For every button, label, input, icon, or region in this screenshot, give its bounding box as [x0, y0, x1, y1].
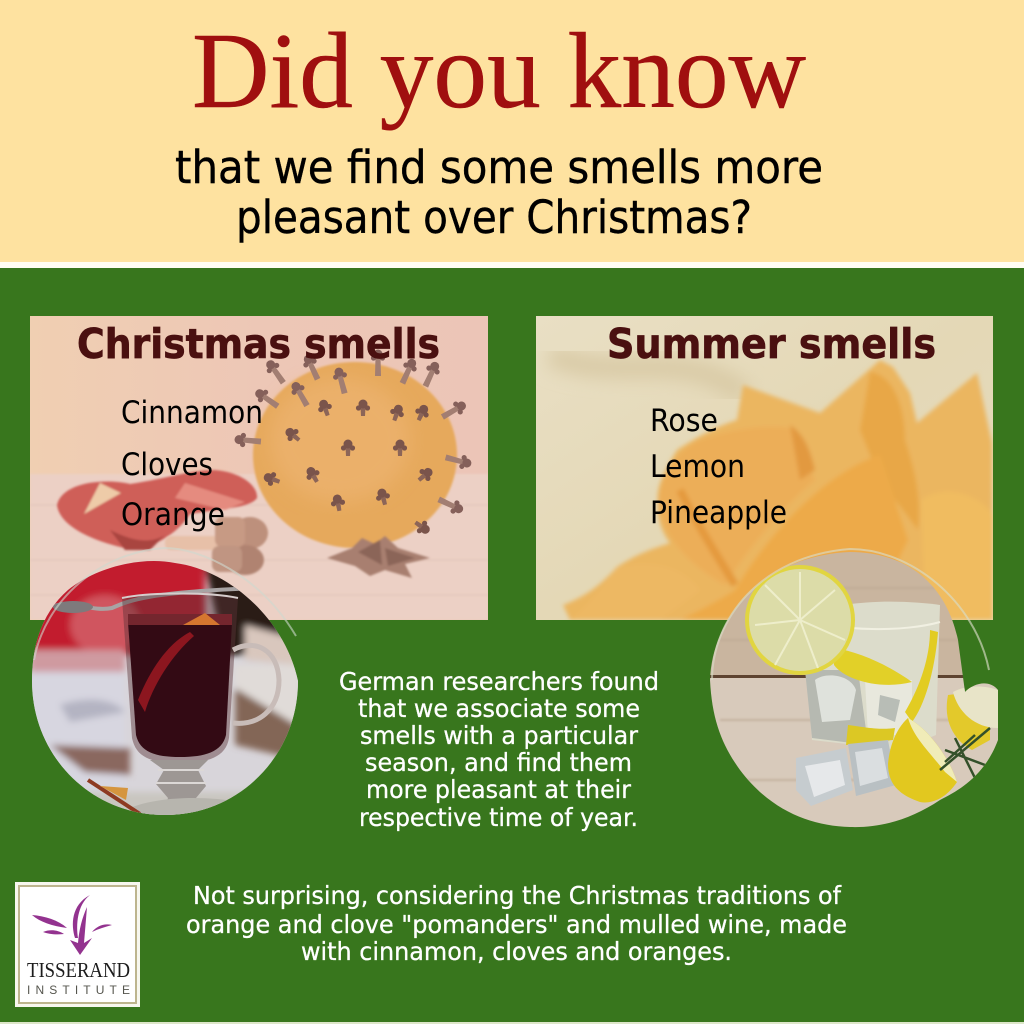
brush stroke ring [712, 549, 989, 680]
pomander photo background [30, 316, 490, 620]
lemon slice [745, 565, 855, 675]
blurred background [30, 545, 300, 820]
list: Christmas smells: Cinnamon [121, 395, 263, 431]
list: Christmas smells: Orange [121, 497, 225, 533]
list: Christmas smells: Cloves [121, 447, 213, 483]
photo: lemon water [700, 545, 1000, 833]
cinnamon stick [88, 780, 140, 814]
research text: more pleasant at their [366, 775, 632, 804]
orange [253, 362, 457, 548]
research text: respective time of year. [359, 803, 638, 832]
bottom edge line [0, 1022, 1024, 1024]
photo: mulled wine [30, 545, 300, 820]
subtitle [175, 141, 823, 244]
closing note: Not surprising, considering the Christmas traditions of [193, 881, 842, 910]
subtitle: that we find some smells more [175, 141, 823, 194]
research text: German researchers found [339, 667, 659, 696]
closing note [186, 881, 847, 966]
heading: Christmas smells: Christmas smells [77, 320, 440, 368]
ribbon [57, 470, 257, 550]
lemon half [888, 718, 957, 802]
list: Summer smells [650, 403, 787, 531]
cloves [234, 350, 473, 538]
list: Summer smells: Pineapple [650, 495, 787, 531]
header band [0, 0, 1024, 268]
list: Summer smells: Lemon [650, 449, 745, 485]
panel: Summer smells [536, 316, 993, 620]
lemon wedges [834, 648, 912, 685]
rose petals [563, 360, 993, 620]
subtitle: pleasant over Christmas? [236, 191, 752, 244]
logo subline: INSTITUTE [27, 983, 130, 997]
brush stroke ring [34, 548, 296, 660]
spoon [55, 588, 258, 609]
closing note: with cinnamon, cloves and oranges. [301, 937, 732, 966]
rose photo background [536, 316, 993, 620]
list: Christmas smells [121, 395, 263, 533]
panel: Christmas smells [30, 316, 490, 620]
glass [802, 602, 940, 750]
closing note: orange and clove "pomanders" and mulled wine, made [186, 910, 847, 939]
logo: Tisserand Institute [15, 882, 140, 1007]
research text: season, and find them [365, 748, 632, 777]
heading: Summer smells: Summer smells [607, 320, 936, 368]
rosemary sprig [940, 728, 990, 778]
ice cubes [796, 748, 853, 806]
list: Summer smells: Rose [650, 403, 718, 439]
title: Did you know [192, 12, 806, 131]
mug [122, 594, 279, 818]
logo wordmark: TISSERAND [27, 958, 130, 982]
research text: smells with a particular [360, 721, 639, 750]
cinnamon sticks [165, 517, 268, 575]
research text: that we associate some [358, 694, 640, 723]
star anise [327, 536, 430, 578]
icon: purple flower [32, 895, 112, 955]
research text [339, 667, 659, 832]
